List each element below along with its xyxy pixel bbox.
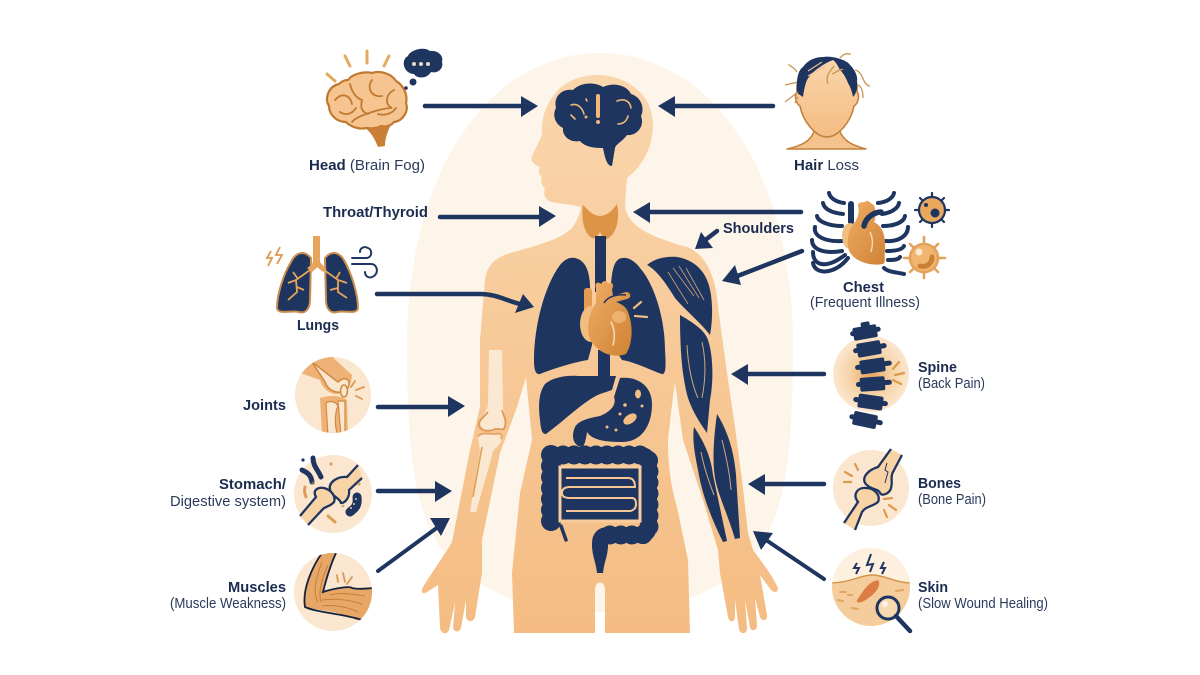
- arrow: spine: [731, 364, 824, 385]
- arrow: throat: [440, 206, 556, 227]
- label: stomach: Stomach/: [219, 476, 287, 493]
- navy brain in head: [554, 84, 643, 166]
- label: skin: Skin: [918, 579, 948, 596]
- thyroid: [582, 204, 618, 239]
- arm bones: [470, 350, 506, 512]
- arrow: bones: [748, 474, 824, 495]
- arrow: chest to thyroid: [633, 202, 801, 223]
- arrow: muscles: [378, 518, 450, 571]
- icon: bones circle: [833, 449, 909, 530]
- label: back pain: (Back Pain): [918, 375, 985, 392]
- body silhouette: [422, 75, 778, 633]
- trachea and esophagus: [595, 236, 610, 382]
- icon: brain with thought cloud: [327, 49, 442, 147]
- icon: spine circle: [833, 319, 909, 431]
- icon: muscle circle: [294, 553, 375, 631]
- label: muscle weakness: (Muscle Weakness): [170, 595, 286, 612]
- arrow: lungs: [377, 294, 534, 313]
- arrow: shoulders: [695, 231, 717, 249]
- label: lungs: Lungs: [297, 317, 339, 334]
- intestines: [551, 455, 649, 573]
- arrow: head: [425, 96, 538, 117]
- label: bone pain: (Bone Pain): [918, 491, 986, 508]
- label: joints: Joints: [243, 397, 286, 414]
- label: head: Head (Brain Fog): [309, 157, 425, 174]
- heart: [580, 281, 647, 356]
- arrow: hair loss: [658, 96, 773, 117]
- icon: lungs: [267, 236, 377, 312]
- background halo: [407, 53, 793, 612]
- label: chest: Chest: [843, 279, 884, 296]
- label: shoulders: Shoulders: [723, 220, 794, 237]
- arrow: skin: [753, 531, 824, 579]
- label: digestive system: Digestive system): [170, 493, 286, 510]
- label: frequent illness: (Frequent Illness): [810, 294, 920, 311]
- label: throat: Throat/Thyroid: [323, 204, 428, 221]
- label: bones: Bones: [918, 475, 961, 492]
- label: hair loss: Hair Loss: [794, 157, 859, 174]
- icon: ribcage, heart and germs: [812, 193, 949, 278]
- liver and stomach: [539, 376, 652, 447]
- label: muscles: Muscles: [228, 579, 286, 596]
- arrow: chest: [722, 251, 802, 285]
- icon: knee joint circle: [295, 357, 371, 433]
- label: slow wound healing: (Slow Wound Healing): [918, 595, 1048, 612]
- label: spine: Spine: [918, 359, 957, 376]
- arrow: joints: [378, 396, 465, 417]
- lungs: [534, 258, 666, 374]
- arm muscles: [647, 257, 740, 542]
- arrow: stomach: [378, 481, 452, 502]
- icon: bald head: [785, 54, 870, 149]
- icon: skin circle: [830, 548, 912, 631]
- icon: digestive joint circle: [294, 455, 372, 533]
